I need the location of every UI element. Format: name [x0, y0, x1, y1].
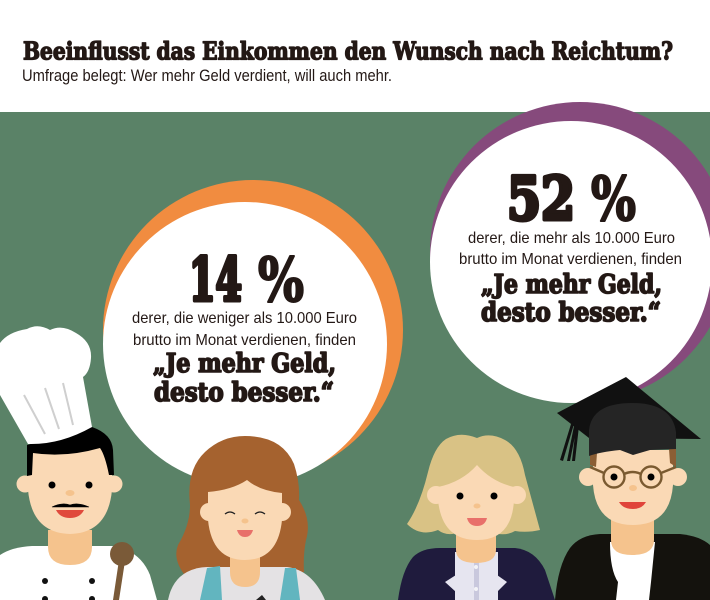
quote: „Je mehr Geld,: [481, 269, 662, 300]
panel: 52 percent bubble: [430, 102, 710, 403]
stat: 52 percent: [507, 164, 636, 235]
figure: graduate: [555, 377, 710, 600]
icon: glasses: [590, 466, 676, 488]
stat: 14 percent: [189, 245, 304, 316]
description: under 10,000 euro: derer, die weniger als 10.000 Euro: [132, 310, 357, 327]
stat: 14 percent: %: [258, 245, 304, 316]
stat: 52 percent: 52: [507, 164, 575, 234]
icon: graduation cap: [557, 377, 701, 461]
quote: desto besser.“: [154, 377, 334, 408]
figure: chef: [0, 326, 157, 600]
description: under 10,000 euro: brutto im Monat verdienen, finden: [133, 332, 356, 349]
stat: 14 percent: 14: [189, 246, 242, 316]
panel: 14 percent bubble: [103, 180, 403, 486]
stat: 52 percent: %: [591, 164, 636, 235]
icon: wooden spoon: [110, 542, 134, 600]
quote: [153, 348, 336, 408]
figure: blonde woman: [398, 435, 555, 600]
quote: desto besser.“: [481, 297, 661, 328]
description: over 10,000 euro: derer, die mehr als 10.000 Euro: [468, 230, 675, 247]
description: under 10,000 euro: [132, 310, 357, 349]
subtitle: Umfrage belegt: Wer mehr Geld verdient, will auch mehr.: [22, 67, 392, 85]
quote: [481, 269, 662, 328]
description: over 10,000 euro: [459, 230, 682, 268]
figure: woman with apron: [168, 436, 325, 600]
description: over 10,000 euro: brutto im Monat verdienen, finden: [459, 251, 682, 268]
quote: „Je mehr Geld,: [153, 348, 336, 379]
